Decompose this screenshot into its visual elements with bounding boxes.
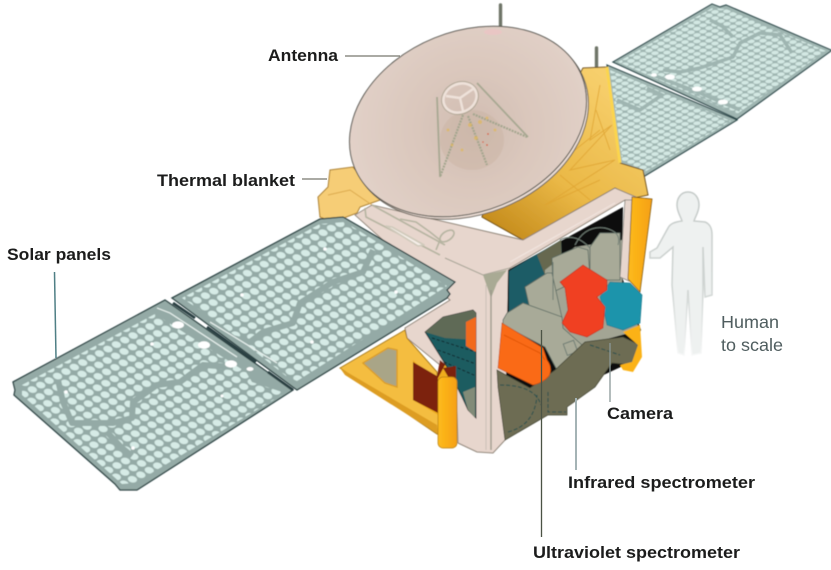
panel hinges [157,303,293,390]
antenna dish [321,0,617,253]
spacecraft body: pale shell [355,188,636,453]
camera: teal instrument [600,282,642,330]
label: Solar panels: Solar panels [7,245,111,264]
grey back fill [545,240,640,370]
infrared spectrometer: red instrument [560,265,607,337]
label: Human to scale: to scale [721,335,783,355]
label: Solar panels [7,245,111,358]
solar panels: left wing [13,217,455,490]
left face: opening with instruments [425,310,476,418]
antenna feed [436,75,528,177]
teal back wall [509,240,562,338]
grey equipment boxes [503,233,620,370]
label: Camera: Camera [607,404,674,423]
antenna masts [500,5,596,68]
solar panels: right wing [607,4,831,177]
dark olive lower shelf [497,337,640,440]
human silhouette [650,192,712,355]
left outer panel [13,300,293,490]
left face: gold panel [340,330,456,435]
thermal blanket: left gold bracket [318,167,380,222]
label: Camera [607,343,674,423]
left inner panel [172,217,455,390]
orange thermal post [628,197,652,292]
label: Human to scale: Human [721,312,779,332]
label: Antenna: Antenna [268,46,339,65]
label: Thermal blanket: Thermal blanket [157,171,295,190]
label: Ultraviolet spectrometer: Ultraviolet spectrometer [533,543,740,562]
yellow support post [438,377,457,448]
label: Human to scale [721,312,783,355]
yellow lower bracket [620,325,642,372]
right inner panel [607,65,737,177]
ultraviolet spectrometer: orange instrument [498,323,551,385]
right face: instrument bay [497,207,642,440]
label: Infrared spectrometer: Infrared spectrometer [568,473,755,492]
pale strut on the right [620,200,634,281]
label: Antenna [268,46,400,65]
thermal blanket: gold frame behind dish [482,67,648,240]
plumbing on top deck [365,205,456,255]
right outer panel [613,4,831,119]
